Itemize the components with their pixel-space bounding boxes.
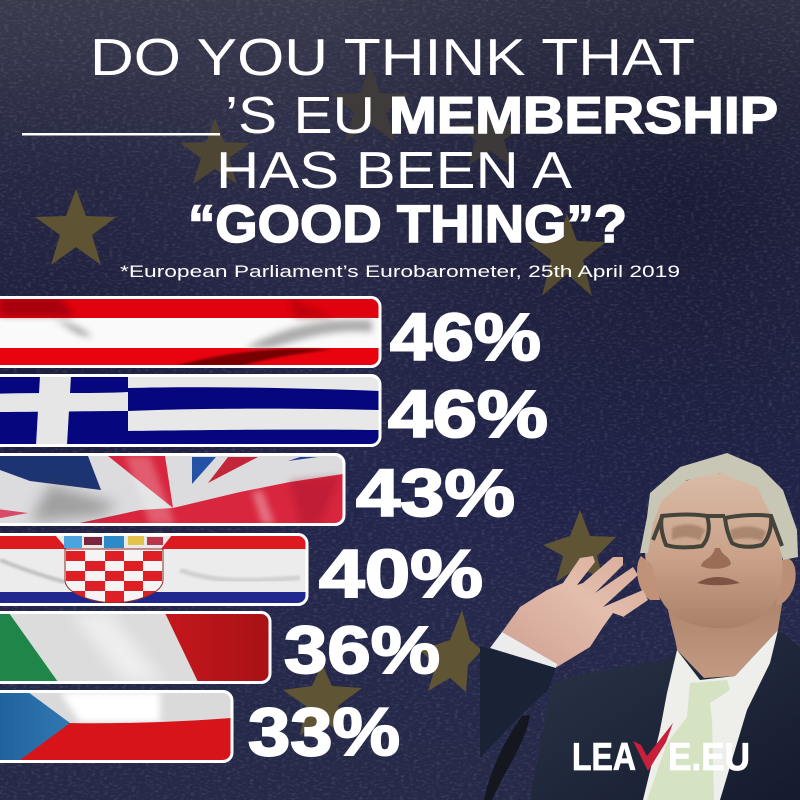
shirt	[643, 630, 778, 800]
neck	[668, 585, 785, 678]
title	[22, 29, 778, 254]
logo: LEAVE.EU: LEA	[572, 736, 636, 779]
title: HAS BEEN A	[216, 142, 572, 200]
value: Croatia: 40%	[319, 536, 483, 612]
tie	[647, 680, 730, 800]
title: MEMBERSHIP	[389, 87, 778, 145]
logo: LEAVE.EU: E.EU	[668, 736, 750, 779]
right ear	[776, 559, 796, 606]
suit body	[530, 630, 800, 800]
value: Greece: 46%	[388, 377, 548, 452]
bar: Greece flag 46%	[0, 374, 381, 447]
mouth	[697, 577, 740, 585]
microphone	[484, 715, 530, 800]
nose	[701, 548, 731, 569]
title: DO YOU THINK THAT	[90, 29, 695, 87]
glasses	[653, 514, 782, 547]
left ear	[637, 556, 660, 600]
raised hand	[502, 556, 648, 667]
value: United Kingdom: 43%	[356, 456, 515, 531]
hair	[640, 453, 798, 560]
bar: Italy flag 36%	[0, 611, 271, 684]
sleeve	[480, 646, 556, 758]
coat of arms crown	[56, 536, 172, 548]
value: Austria: 46%	[390, 300, 541, 375]
blank country underline	[22, 133, 220, 136]
source note: *European Parliament’s Eurobarometer, 25th April 2019	[120, 262, 680, 281]
eyebrows and eye shadow	[672, 524, 766, 541]
bar: Austria flag 46%	[0, 296, 381, 368]
bar: United Kingdom flag 43%	[0, 453, 345, 526]
bar: Croatia flag 40%	[0, 533, 308, 606]
logo: LEAVE.EU	[572, 723, 750, 779]
bar: Czech Republic flag 33%	[0, 690, 233, 763]
EU stars	[35, 66, 616, 735]
title: ’S EU	[225, 87, 375, 145]
value: Italy: 36%	[284, 613, 440, 688]
title: “GOOD THING”?	[188, 195, 627, 254]
photo: man cupping his ear	[480, 453, 800, 800]
icon: flag check mark	[633, 723, 673, 771]
value: Czech Republic: 33%	[248, 694, 400, 770]
face	[645, 473, 783, 628]
shirt cuff	[490, 632, 557, 668]
